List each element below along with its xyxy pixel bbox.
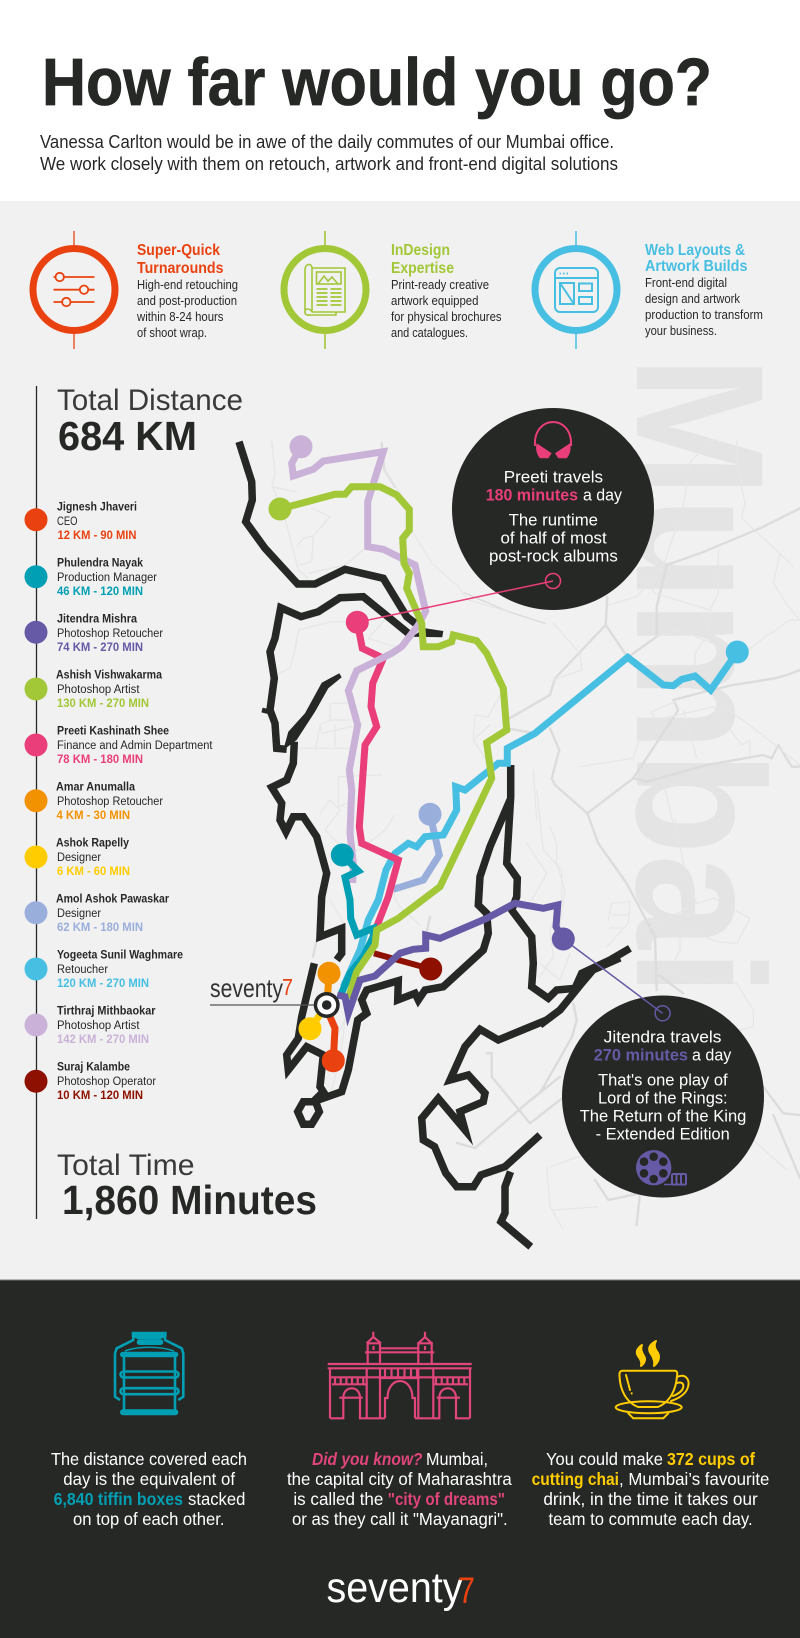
icon: cup of chai (616, 1341, 689, 1418)
person: Jignesh Jhaveri (24, 502, 137, 542)
fact: cutting chai (532, 1341, 769, 1529)
route: Yogeeta Sunil Waghmare (343, 640, 749, 987)
route: Jignesh Jhaveri (322, 1005, 345, 1072)
icon: browser window (535, 231, 617, 349)
timeline axis (36, 386, 38, 1219)
person: Jignesh Jhaveri: 12 KM - 90 MIN (58, 530, 136, 542)
person: Amol Ashok Pawaskar: Designer (57, 908, 101, 920)
fact text: You could make (546, 1449, 663, 1469)
description: for physical brochures (391, 310, 502, 324)
fact text: team to commute each day. (548, 1509, 753, 1529)
callout text: The runtime (509, 511, 598, 530)
icon: headphones (535, 422, 571, 458)
fact: did you know (287, 1332, 512, 1529)
icon: brochure (284, 231, 366, 349)
person: Jignesh Jhaveri: CEO (57, 516, 78, 528)
callout text: Jitendra travels (604, 1028, 721, 1047)
fact text: stacked (188, 1489, 245, 1509)
fact text (287, 1449, 512, 1529)
service: indesign expertise (284, 231, 502, 349)
person: Suraj Kalambe: Photoshop Operator (57, 1076, 156, 1088)
person: Suraj Kalambe (24, 1062, 156, 1102)
callout text: Preeti travels (504, 467, 603, 486)
heading: Turnarounds (137, 260, 224, 277)
person: Preeti Kashinath Shee: Finance and Admin Department (57, 740, 213, 752)
person: Ashish Vishwakarma (24, 670, 163, 710)
callout text: post-rock albums (489, 547, 618, 566)
total time: 1,860 Minutes (62, 1177, 317, 1223)
person: Jitendra Mishra: 74 KM - 270 MIN (57, 642, 143, 654)
person: Amol Ashok Pawaskar (24, 894, 169, 934)
fact text (51, 1449, 247, 1529)
route: Ashish Vishwakarma (268, 487, 507, 998)
description: and catalogues. (391, 326, 468, 340)
fact text: The distance covered each (51, 1449, 247, 1469)
description: Print-ready creative (391, 278, 489, 292)
fact text: cutting chai (532, 1469, 619, 1489)
fact text: day is the equivalent of (63, 1469, 235, 1489)
intro text (40, 131, 618, 174)
person: Yogeeta Sunil Waghmare: Yogeeta Sunil Waghmare (57, 950, 183, 962)
fact text: on top of each other. (73, 1509, 224, 1529)
fact text (532, 1449, 769, 1529)
person: Amar Anumalla (24, 782, 163, 822)
description: artwork equipped (391, 294, 479, 308)
person: Yogeeta Sunil Waghmare (24, 950, 183, 990)
total time (57, 1149, 317, 1223)
fact text: "city of dreams" (388, 1489, 505, 1509)
description (391, 278, 502, 340)
seventy7 office label: 7 (282, 974, 293, 1000)
route: Suraj Kalambe (374, 953, 442, 980)
person: Jitendra Mishra: Jitendra Mishra (57, 614, 138, 626)
callout text: 180 minutes (486, 486, 578, 505)
map background panel (0, 201, 800, 1280)
service: super-quick turnarounds (33, 231, 238, 349)
description: and post-production (137, 294, 237, 308)
person: Amar Anumalla: Amar Anumalla (56, 782, 136, 794)
route: Phulendra Nayak (331, 844, 373, 997)
callout text: of half of most (500, 529, 607, 548)
seventy7 footer logo: seventy (326, 1564, 463, 1612)
heading (391, 242, 454, 277)
person: Yogeeta Sunil Waghmare: Retoucher (57, 964, 108, 976)
route: Amar Anumalla (318, 962, 340, 1005)
person: Phulendra Nayak: Production Manager (57, 572, 157, 584)
connector: Preeti (357, 574, 560, 622)
total distance: Total Distance (57, 384, 243, 417)
person: Ashish Vishwakarma: Photoshop Artist (57, 684, 140, 696)
person: Tirthraj Mithbaokar: Photoshop Artist (57, 1020, 140, 1032)
callout: Preeti (452, 408, 654, 610)
fact text: Mumbai, (426, 1449, 488, 1469)
office marker (314, 992, 340, 1018)
person: Ashok Rapelly: 6 KM - 60 MIN (57, 866, 130, 878)
fact text: 6,840 tiffin boxes (54, 1489, 183, 1509)
service: web layouts (535, 231, 763, 349)
callout text: 270 minutes (594, 1046, 688, 1065)
person: Suraj Kalambe: 10 KM - 120 MIN (57, 1090, 143, 1102)
description: design and artwork (645, 292, 741, 306)
total distance: 684 KM (58, 413, 197, 459)
person: Ashok Rapelly: Designer (57, 852, 101, 864)
person: Preeti Kashinath Shee (24, 726, 213, 766)
fact: tiffin boxes (51, 1332, 247, 1529)
callout text: - Extended Edition (596, 1125, 730, 1144)
route: Preeti Kashinath Shee (346, 611, 398, 927)
person: Phulendra Nayak: 46 KM - 120 MIN (57, 586, 143, 598)
person: Ashok Rapelly: Ashok Rapelly (56, 838, 130, 850)
description (645, 276, 763, 338)
map: coastline (239, 442, 630, 1247)
fact text: 372 cups of (667, 1449, 755, 1469)
callout text: a day (692, 1046, 732, 1065)
person: Preeti Kashinath Shee: 78 KM - 180 MIN (57, 754, 143, 766)
callout text: Lord of the Rings: (598, 1089, 728, 1108)
route: Tirthraj Mithbaokar (290, 435, 426, 883)
description: of shoot wrap. (137, 326, 207, 340)
seventy7 footer logo: 7 (458, 1570, 475, 1611)
description: Front-end digital (645, 276, 727, 290)
person: Ashish Vishwakarma: 130 KM - 270 MIN (57, 698, 149, 710)
icon: film reel (636, 1150, 686, 1185)
intro text: Vanessa Carlton would be in awe of the daily commutes of our Mumbai office. (40, 131, 614, 152)
team list (24, 502, 213, 1102)
icon: tiffin (115, 1332, 183, 1415)
total distance (57, 384, 243, 459)
person: Phulendra Nayak (24, 558, 157, 598)
callout text: That's one play of (598, 1071, 728, 1090)
description (136, 278, 238, 340)
person: Tirthraj Mithbaokar: Tirthraj Mithbaokar (57, 1006, 156, 1018)
person: Jitendra Mishra: Photoshop Retoucher (57, 628, 163, 640)
person: Suraj Kalambe: Suraj Kalambe (57, 1062, 130, 1074)
person: Ashish Vishwakarma: Ashish Vishwakarma (56, 670, 163, 682)
total time: Total Time (57, 1149, 194, 1182)
heading: Artwork Builds (645, 258, 748, 275)
title: How far would you go? (42, 45, 712, 120)
description: within 8-24 hours (136, 310, 224, 324)
callout text: The Return of the King (580, 1107, 746, 1126)
person: Phulendra Nayak: Phulendra Nayak (57, 558, 144, 570)
map: road network (272, 440, 800, 1230)
person: Yogeeta Sunil Waghmare: 120 KM - 270 MIN (57, 978, 149, 990)
heading (645, 242, 748, 275)
person: Preeti Kashinath Shee: Preeti Kashinath Shee (57, 726, 169, 738)
callout text: a day (583, 486, 622, 505)
route: Ashok Rapelly (298, 1005, 327, 1040)
person: Tirthraj Mithbaokar (24, 1006, 156, 1046)
fact text: drink, in the time it takes our (543, 1489, 758, 1509)
intro text: We work closely with them on retouch, artwork and front-end digital solutions (40, 153, 618, 174)
description: production to transform (645, 308, 763, 322)
person: Jitendra Mishra (24, 614, 163, 654)
icon: sliders (33, 231, 115, 349)
person: Amol Ashok Pawaskar: Amol Ashok Pawaskar (56, 894, 169, 906)
person: Tirthraj Mithbaokar: 142 KM - 270 MIN (57, 1034, 149, 1046)
heading: Web Layouts & (645, 242, 745, 259)
seventy7 office label: seventy (210, 973, 283, 1003)
fact text: the capital city of Maharashtra (287, 1469, 512, 1489)
person: Amar Anumalla: Photoshop Retoucher (57, 796, 163, 808)
person: Ashok Rapelly (24, 838, 130, 878)
icon: gateway of india (328, 1332, 472, 1418)
route: Jitendra Mishra (337, 903, 575, 1013)
route: Amol Ashok Pawaskar (393, 803, 442, 889)
fact text: Did you know? (312, 1449, 423, 1469)
heading: Super-Quick (137, 242, 220, 259)
callout: Jitendra (562, 996, 764, 1198)
heading: Expertise (391, 260, 454, 277)
fact text: is called the (293, 1489, 383, 1509)
fact text: , Mumbai’s favourite (619, 1469, 769, 1489)
heading: InDesign (391, 242, 450, 259)
fact text: or as they call it "Mayanagri". (292, 1509, 508, 1529)
callout text (486, 467, 622, 566)
watermark: Mumbai: Mumbai (598, 356, 800, 996)
person: Jignesh Jhaveri: Jignesh Jhaveri (57, 502, 137, 514)
description: your business. (645, 324, 717, 338)
footer panel (0, 1280, 800, 1638)
person: Amol Ashok Pawaskar: 62 KM - 180 MIN (57, 922, 143, 934)
callout text (580, 1028, 746, 1144)
connector: Jitendra (563, 939, 670, 1021)
person: Amar Anumalla: 4 KM - 30 MIN (56, 810, 130, 822)
heading (137, 242, 224, 277)
description: High-end retouching (137, 278, 238, 292)
